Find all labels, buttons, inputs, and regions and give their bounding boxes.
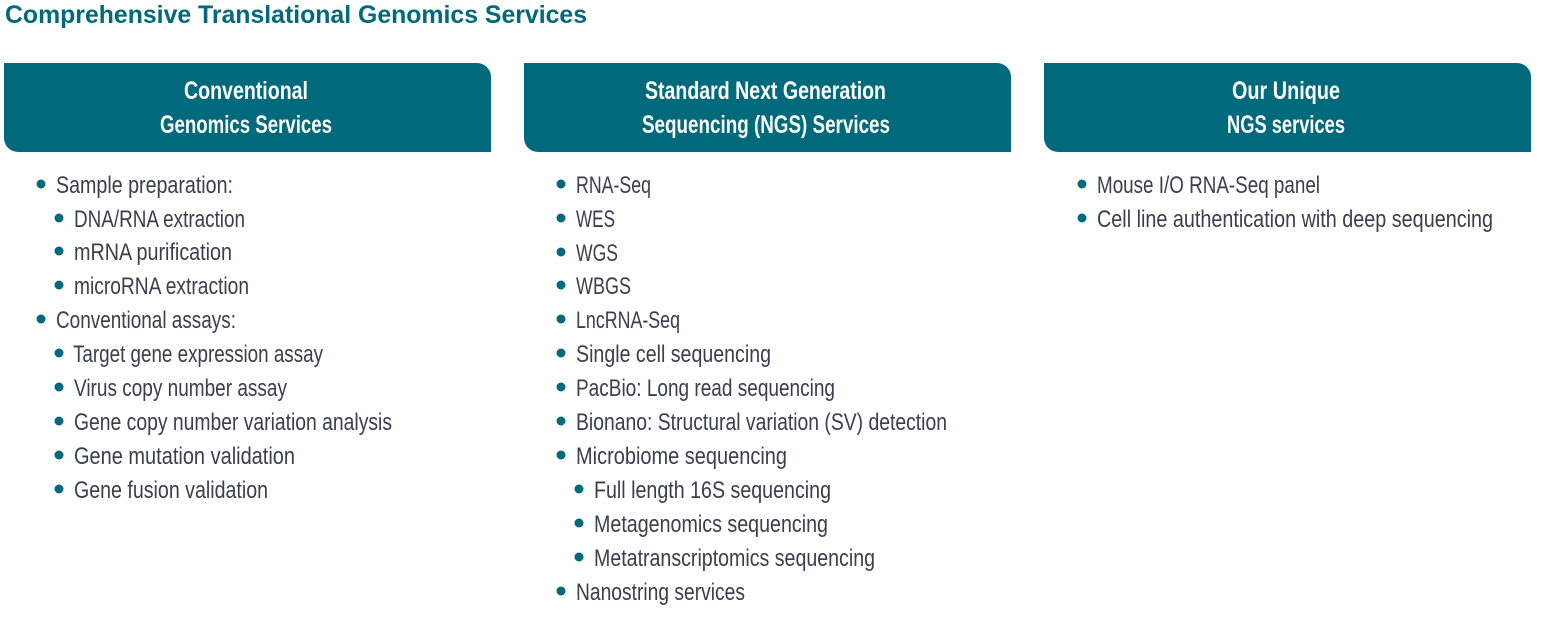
list: conventional genomics items: Conventional assays: — [56, 307, 236, 334]
header: our unique NGS services: NGS services — [1227, 111, 1345, 139]
list: conventional genomics items: mRNA purification — [74, 239, 232, 266]
list: standard NGS items: Nanostring services — [576, 579, 745, 606]
list: conventional genomics items: Target gene expression assay — [73, 341, 323, 368]
list: conventional genomics items: Virus copy number assay — [74, 375, 287, 402]
list: standard NGS items: RNA-Seq — [576, 172, 651, 199]
list: conventional genomics items: Sample preparation: — [56, 172, 233, 199]
list: standard NGS items: WBGS — [576, 273, 631, 300]
header: conventional genomics services — [4, 63, 491, 152]
header: standard NGS services: Sequencing (NGS) Services — [642, 111, 890, 139]
list: conventional genomics items: Gene mutation validation — [74, 443, 295, 470]
list: conventional genomics items: DNA/RNA extraction — [74, 206, 245, 233]
header: our unique NGS services — [1044, 63, 1531, 152]
header: our unique NGS services: Our Unique — [1232, 77, 1340, 105]
list: standard NGS items: PacBio: Long read sequencing — [576, 375, 835, 402]
list: conventional genomics items — [36, 172, 392, 504]
list: standard NGS items — [556, 172, 947, 606]
header: conventional genomics services: Genomics Services — [160, 111, 332, 139]
list: standard NGS items: Full length 16S sequencing — [594, 477, 831, 504]
header: standard NGS services: Standard Next Generation — [645, 77, 886, 105]
panel: conventional genomics services — [4, 63, 491, 504]
list: standard NGS items: Bionano: Structural variation (SV) detection — [576, 409, 947, 436]
list: standard NGS items: LncRNA-Seq — [576, 307, 680, 334]
title: Comprehensive Translational Genomics Services — [5, 1, 587, 29]
list: unique NGS items: Mouse I/O RNA-Seq panel — [1097, 172, 1320, 199]
header: standard NGS services — [524, 63, 1011, 152]
list: standard NGS items: Metatranscriptomics sequencing — [594, 545, 875, 572]
list: standard NGS items: Single cell sequencing — [576, 341, 771, 368]
list: standard NGS items: Metagenomics sequencing — [594, 511, 828, 538]
list: standard NGS items: WES — [576, 206, 615, 233]
panel: standard NGS services — [524, 63, 1011, 606]
list: standard NGS items: WGS — [576, 240, 618, 267]
header: conventional genomics services: Conventional — [184, 77, 308, 105]
panel: our unique NGS services — [1044, 63, 1531, 233]
list: conventional genomics items: Gene copy number variation analysis — [74, 409, 392, 436]
list: unique NGS items — [1078, 172, 1493, 233]
list: conventional genomics items: microRNA extraction — [74, 273, 249, 300]
list: conventional genomics items: Gene fusion validation — [74, 477, 268, 504]
list: standard NGS items: Microbiome sequencing — [576, 443, 787, 470]
